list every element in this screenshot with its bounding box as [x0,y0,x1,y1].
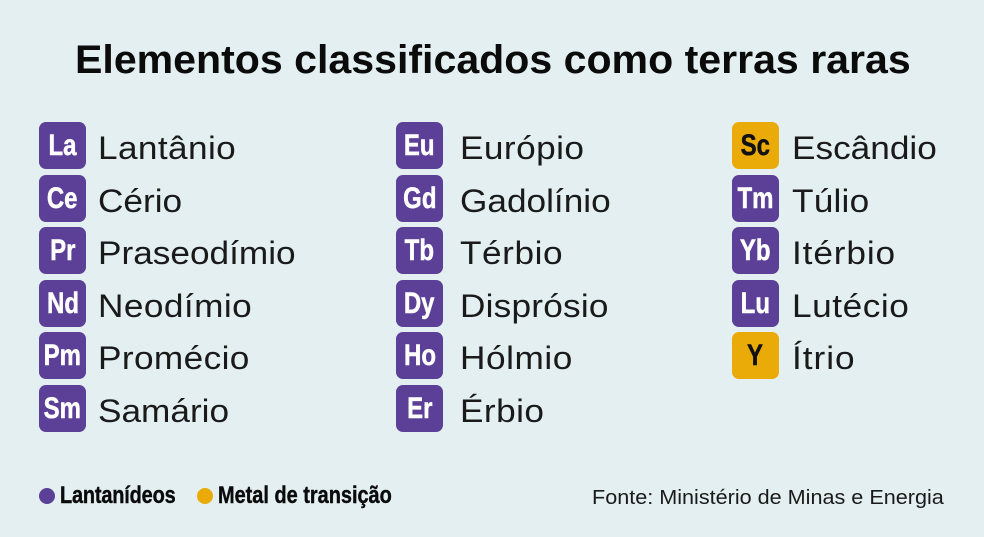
panel: column 2 [396,122,611,432]
element: Praseodímio: Pr [50,234,75,267]
element: Samário: Samário [98,393,229,429]
element: Promécio: Promécio [98,340,250,376]
element: Ítrio [732,332,856,379]
element: Lantânio: La [48,129,76,162]
element: Cério: Cério [98,183,182,219]
element: Túlio: Tm [738,182,774,215]
element: Escândio: Escândio [792,130,937,166]
element: Lantânio: Lantânio [98,130,236,166]
element: Hólmio: Ho [404,339,436,372]
element: Neodímio: Neodímio [98,288,252,324]
element: Térbio: Tb [405,234,434,267]
title: Elementos classificados como terras raras [75,38,911,82]
element: Térbio: Térbio [460,235,563,271]
source note: Fonte: Ministério de Minas e Energia [592,487,944,509]
element: Cério: Ce [47,182,78,215]
legend dot: Lantanídeos [39,488,55,504]
element: Érbio: Er [407,392,432,425]
element: Itérbio [732,227,896,274]
element: Neodímio: Nd [46,287,78,320]
element: Escândio [732,122,937,169]
element: Samário: Sm [44,392,81,425]
element: Itérbio: Itérbio [792,235,896,271]
element: Európio: Európio [460,130,584,166]
element: Térbio [396,227,563,274]
element: Praseodímio: Praseodímio [98,235,296,271]
element: Túlio: Túlio [792,183,869,219]
element: Gadolínio [396,175,611,222]
element: Európio: Eu [404,129,435,162]
element: Promécio: Pm [44,339,81,372]
legend dot: Metal de transição [197,488,213,504]
element: Érbio [396,385,544,432]
element: Itérbio: Yb [740,234,771,267]
element: Disprósio [396,280,609,327]
element: Disprósio: Disprósio [460,288,609,324]
element: Lutécio: Lutécio [792,288,909,324]
legend [39,482,392,509]
element: Escândio: Sc [741,129,770,162]
element: Érbio: Érbio [460,393,544,429]
element: Lantânio [39,122,236,169]
element: Promécio [39,332,250,379]
element: Neodímio [39,280,252,327]
panel: column 3 [732,122,937,379]
element: Túlio [732,175,869,222]
element: Ítrio: Ítrio [792,340,856,376]
element: Gadolínio: Gadolínio [460,183,611,219]
element: Cério [39,175,182,222]
element: Lutécio: Lu [741,287,770,320]
element: Praseodímio [39,227,296,274]
element: Lutécio [732,280,909,327]
panel: column 1 [39,122,296,432]
element: Európio [396,122,584,169]
legend label: Lantanídeos: Lantanídeos [60,482,175,509]
element: Samário [39,385,229,432]
element: Gadolínio: Gd [403,182,436,215]
legend label: Metal de transição: Metal de transição [218,482,392,509]
element: Ítrio: Y [747,339,763,372]
element: Disprósio: Dy [404,287,435,320]
element: Hólmio [396,332,573,379]
element: Hólmio: Hólmio [460,340,573,376]
